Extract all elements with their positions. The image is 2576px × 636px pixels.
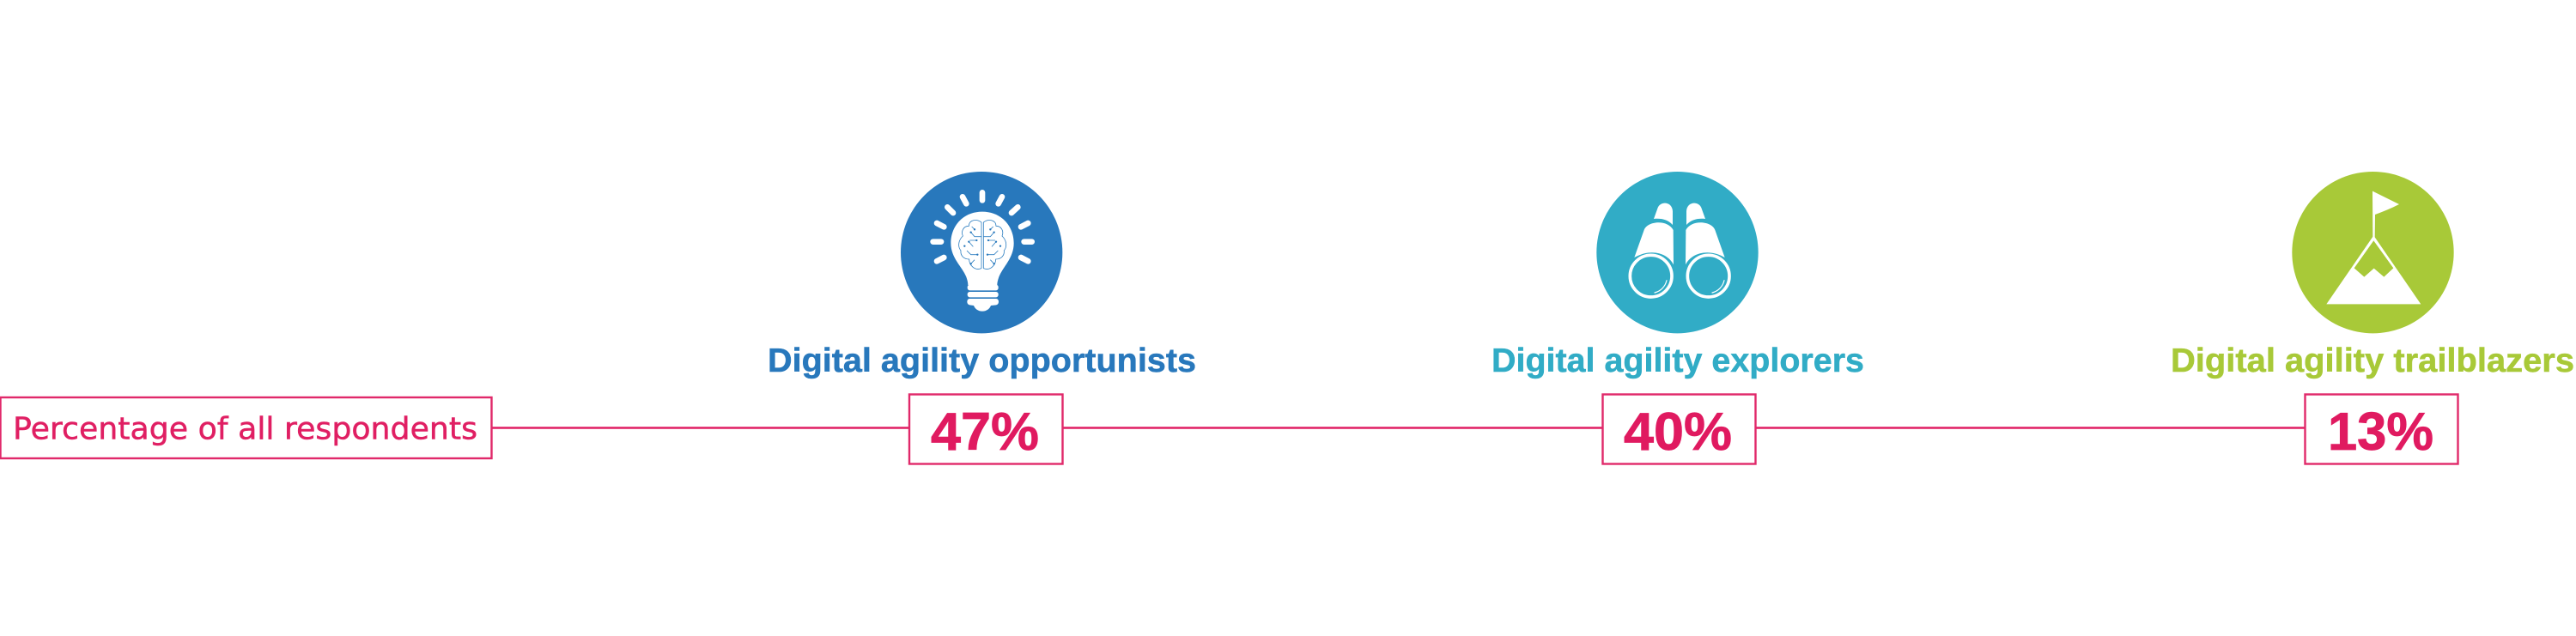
value box: 13% bbox=[2305, 395, 2458, 463]
segment: explorers bbox=[1492, 172, 1864, 463]
row label: percentage of all respondents bbox=[0, 397, 491, 458]
icon: mountain with flag bbox=[2292, 172, 2454, 333]
heading: trailblazers: Digital agility trailblazers bbox=[2171, 342, 2574, 379]
value box: 13%: 13% bbox=[2328, 403, 2433, 462]
icon: binoculars bbox=[1596, 172, 1759, 333]
icon: light bulb with brain bbox=[901, 172, 1062, 333]
segment: opportunists bbox=[768, 172, 1196, 463]
heading: opportunists: Digital agility opportunists bbox=[768, 342, 1196, 379]
value box: 47% bbox=[909, 395, 1063, 463]
value box: 47%: 47% bbox=[931, 403, 1039, 462]
row label: percentage of all respondents: Percentage of all respondents bbox=[13, 411, 477, 446]
heading: explorers: Digital agility explorers bbox=[1492, 342, 1864, 379]
value box: 40%: 40% bbox=[1624, 403, 1732, 462]
value box: 40% bbox=[1602, 395, 1755, 463]
connector line bbox=[492, 427, 2305, 429]
segment: trailblazers bbox=[2171, 172, 2574, 463]
